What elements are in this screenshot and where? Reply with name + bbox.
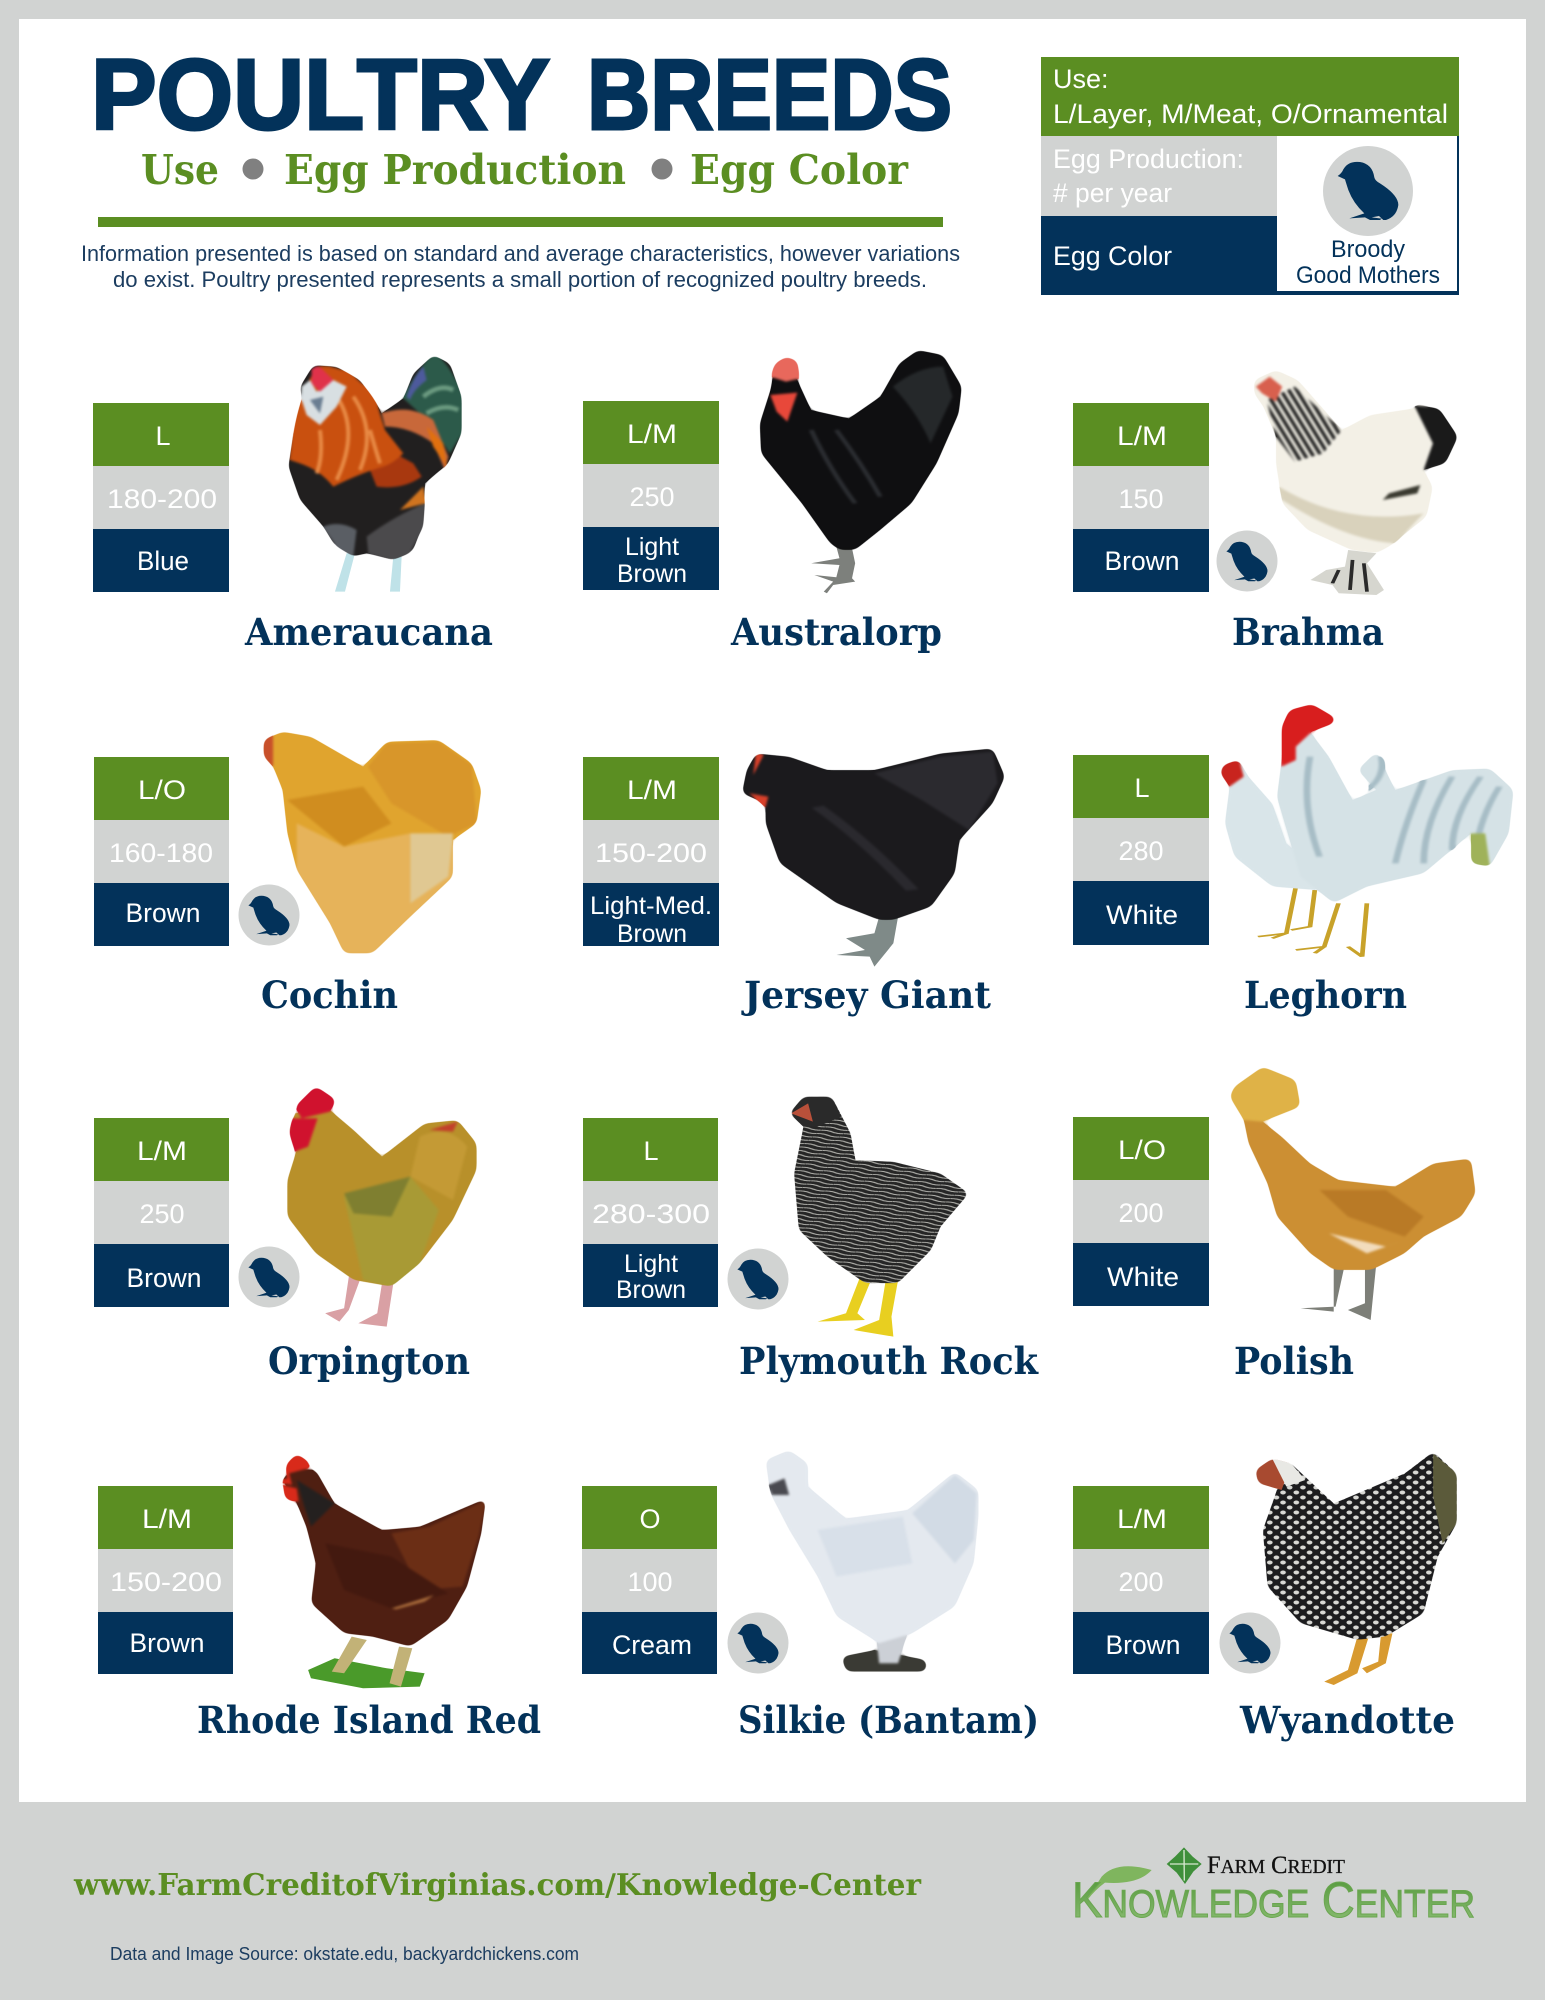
name: Plymouth Rock: Plymouth Rock bbox=[739, 1339, 1039, 1383]
subtitle: use, egg production, egg color bbox=[141, 146, 909, 194]
legend panel: # per year bbox=[1053, 178, 1172, 208]
stat stack: L/O bbox=[1118, 1135, 1166, 1165]
stat stack: Light bbox=[624, 1250, 678, 1278]
legend panel: L/Layer, M/Meat, O/Ornamental bbox=[1053, 99, 1448, 129]
Farm Credit wordmark: FARM CREDIT bbox=[1207, 1852, 1345, 1879]
name: Silkie (Bantam): Silkie (Bantam) bbox=[738, 1698, 1039, 1742]
icon: broody chick bbox=[238, 884, 300, 946]
legend panel: Broody bbox=[1331, 236, 1405, 263]
illustration: Polish hen bbox=[1230, 1067, 1476, 1320]
subtitle: use, egg production, egg color: Use bbox=[141, 146, 219, 194]
panel: Plymouth Rock bbox=[583, 1097, 1039, 1383]
stat stack: Brown bbox=[617, 560, 687, 588]
title bbox=[91, 39, 952, 151]
panel: Cochin bbox=[94, 732, 481, 1017]
stat stack: L/M bbox=[627, 419, 677, 449]
stat stack: 150-200 bbox=[110, 1567, 222, 1597]
stat stack: 250 bbox=[629, 482, 675, 512]
stat stack: Brown bbox=[617, 920, 687, 948]
stat stack: Brown bbox=[616, 1276, 686, 1304]
panel: Rhode Island Red bbox=[98, 1453, 541, 1742]
stat stack: Light-Med. bbox=[590, 892, 712, 920]
legend panel bbox=[1041, 57, 1459, 295]
stat stack: Brown bbox=[1106, 1630, 1180, 1660]
stat stack: White bbox=[1106, 900, 1178, 930]
green divider rule bbox=[98, 217, 943, 227]
stat stack bbox=[94, 757, 229, 946]
icon: broody chick bbox=[238, 1246, 300, 1308]
legend panel: Use: bbox=[1053, 64, 1109, 94]
stat stack: 100 bbox=[627, 1567, 673, 1597]
name: Orpington: Orpington bbox=[268, 1339, 470, 1383]
stat stack bbox=[583, 757, 719, 948]
illustration: Brahma hen bbox=[1254, 370, 1458, 595]
illustration: Orpington rooster bbox=[287, 1086, 477, 1327]
stat stack: Blue bbox=[137, 546, 189, 576]
name: Ameraucana: Ameraucana bbox=[244, 610, 493, 654]
panel: Orpington bbox=[94, 1086, 477, 1383]
icon: broody chick bbox=[1220, 1612, 1280, 1674]
panel: Jersey Giant bbox=[583, 748, 1005, 1017]
name: Rhode Island Red: Rhode Island Red bbox=[197, 1698, 541, 1742]
illustration: Australorp rooster bbox=[760, 350, 962, 593]
panel: Polish bbox=[1073, 1067, 1476, 1383]
panel: Ameraucana bbox=[93, 355, 493, 654]
stat stack: L/M bbox=[627, 775, 677, 805]
stat stack: White bbox=[1107, 1262, 1179, 1292]
title: BREEDS bbox=[587, 39, 952, 151]
stat stack: Brown bbox=[126, 898, 200, 928]
intro text block bbox=[81, 241, 960, 292]
illustration: Silkie hen bbox=[766, 1450, 979, 1672]
stat stack: L bbox=[643, 1136, 659, 1166]
stat stack bbox=[1073, 1486, 1209, 1674]
legend panel: Good Mothers bbox=[1296, 262, 1440, 289]
source credit: Data and Image Source: okstate.edu, backyardchickens.com bbox=[110, 1944, 579, 1964]
icon: broody chick bbox=[728, 1612, 788, 1674]
stat stack: L/O bbox=[138, 775, 186, 805]
illustration: Cochin hen bbox=[264, 732, 481, 953]
intro text block: do exist. Poultry presented represents a small portion of recognized poultry breeds. bbox=[113, 267, 927, 292]
illustration: Leghorn pair bbox=[1220, 704, 1514, 957]
stat stack bbox=[93, 403, 229, 592]
stat stack bbox=[1073, 1117, 1209, 1306]
stat stack: Brown bbox=[130, 1628, 204, 1658]
legend panel: Egg Color bbox=[1053, 241, 1172, 271]
title: POULTRY bbox=[91, 39, 550, 151]
stat stack: L/M bbox=[137, 1136, 187, 1166]
stat stack: 250 bbox=[139, 1199, 185, 1229]
logo: Farm Credit Knowledge Center bbox=[1072, 1847, 1475, 1928]
name: Cochin: Cochin bbox=[261, 973, 398, 1017]
name: Polish: Polish bbox=[1234, 1339, 1354, 1383]
icon: broody chick bbox=[1216, 530, 1278, 592]
stat stack: O bbox=[639, 1504, 661, 1534]
stat stack: Brown bbox=[1104, 546, 1180, 576]
panel: Silkie (Bantam) bbox=[582, 1450, 1039, 1742]
panel: Wyandotte bbox=[1073, 1452, 1457, 1742]
name: Australorp: Australorp bbox=[730, 610, 942, 654]
stat stack bbox=[583, 1118, 718, 1307]
name: Wyandotte: Wyandotte bbox=[1239, 1698, 1455, 1742]
website url: www.FarmCreditofVirginias.com/Knowledge-Center bbox=[73, 1868, 922, 1903]
stat stack: L/M bbox=[1117, 1504, 1167, 1534]
stat stack bbox=[583, 401, 719, 590]
name: Leghorn: Leghorn bbox=[1244, 973, 1407, 1017]
illustration: Ameraucana rooster bbox=[288, 355, 462, 592]
stat stack: 280 bbox=[1118, 836, 1164, 866]
icon: broody chick bbox=[728, 1248, 788, 1310]
legend panel: Egg Production: bbox=[1053, 144, 1244, 174]
stat stack bbox=[582, 1486, 717, 1674]
stat stack: L/M bbox=[142, 1504, 192, 1534]
panel: Brahma bbox=[1073, 370, 1458, 654]
stat stack: L bbox=[155, 421, 171, 451]
name: Jersey Giant: Jersey Giant bbox=[741, 973, 991, 1017]
illustration: Jersey Giant hen bbox=[742, 748, 1005, 967]
stat stack bbox=[1073, 403, 1209, 592]
Knowledge Center wordmark: KNOWLEDGE CENTER bbox=[1072, 1872, 1475, 1928]
subtitle: use, egg production, egg color: Egg Color bbox=[690, 146, 909, 194]
subtitle: use, egg production, egg color: Egg Production bbox=[284, 146, 626, 194]
stat stack: 150 bbox=[1118, 484, 1164, 514]
name: Brahma: Brahma bbox=[1232, 610, 1384, 654]
stat stack: 200 bbox=[1118, 1198, 1164, 1228]
illustration: Plymouth Rock hen bbox=[789, 1097, 969, 1337]
intro text block: Information presented is based on standard and average characteristics, however variations bbox=[81, 241, 960, 266]
illustration: Wyandotte hen bbox=[1255, 1452, 1457, 1685]
stat stack bbox=[98, 1486, 233, 1674]
stat stack: L bbox=[1134, 773, 1150, 803]
stat stack bbox=[1073, 755, 1209, 945]
stat stack bbox=[94, 1118, 229, 1307]
stat stack: 180-200 bbox=[107, 484, 217, 514]
illustration: Rhode Island Red hen bbox=[276, 1453, 486, 1688]
stat stack: 280-300 bbox=[592, 1199, 710, 1229]
stat stack: 160-180 bbox=[109, 838, 213, 868]
stat stack: L/M bbox=[1117, 421, 1167, 451]
stat stack: Cream bbox=[612, 1630, 692, 1660]
icon: clover diamond bbox=[1167, 1847, 1202, 1884]
stat stack: 150-200 bbox=[595, 838, 707, 868]
stat stack: 200 bbox=[1118, 1567, 1164, 1597]
panel: Leghorn bbox=[1073, 704, 1514, 1017]
stat stack: Brown bbox=[126, 1263, 202, 1293]
icon: leaf bbox=[1083, 1866, 1152, 1900]
panel: Australorp bbox=[583, 350, 962, 654]
stat stack: Light bbox=[625, 533, 679, 561]
